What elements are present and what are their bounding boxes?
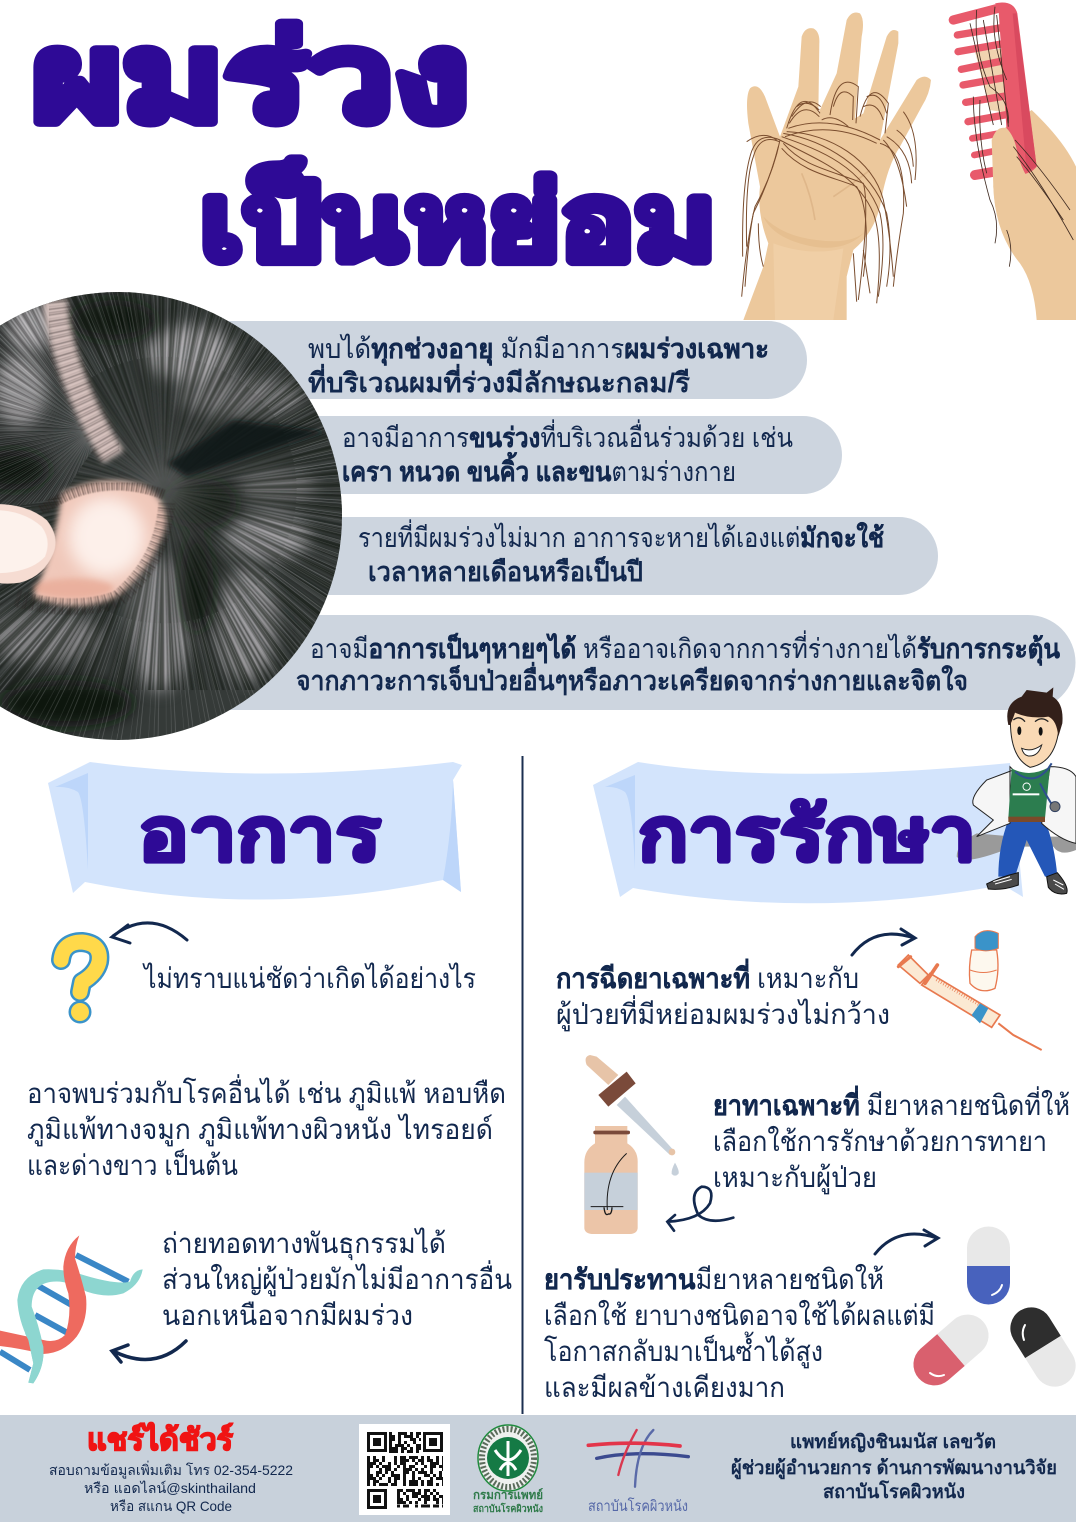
treatment 3: oral medicine: โอกาสกลับมาเป็นซ้ำได้สูง [544, 1331, 823, 1369]
radial dark hair [0, 323, 330, 657]
footer: author credit: สถาบันโรคผิวหนัง [823, 1480, 965, 1503]
treatment 2: topical medicine [584, 1055, 1070, 1234]
symptom 3: genetics: นอกเหนือจากมีผมร่วง [162, 1300, 413, 1331]
hair [1007, 687, 1063, 737]
treatment 1: injection [556, 929, 1042, 1050]
comb [953, 7, 1023, 175]
icon: DNA [0, 1235, 143, 1383]
treatment 1: injection: ผู้ป่วยที่มีหย่อมผมร่วงไม่กว้าง [556, 995, 890, 1032]
treatment 2: topical medicine: เลือกใช้การรักษาด้วยการทายา [713, 1125, 1047, 1157]
info pill 4 [200, 615, 1076, 710]
dark hair masses [0, 300, 237, 727]
info pill 3: รายที่มีผมร่วงไม่มาก อาการจะหายได้เองแต่มักจะใช้ [358, 519, 884, 553]
icon: syringe and vial [898, 931, 1042, 1050]
radial light hair [0, 323, 330, 657]
treatment 1: injection: การฉีดยาเฉพาะที่ เหมาะกับ [556, 958, 859, 994]
info pill 2: เครา หนวด ขนคิ้ว และขนตามร่างกาย [342, 451, 736, 487]
symptom 2: associated diseases: และด่างขาว เป็นต้น [27, 1148, 238, 1181]
footer: author credit: แพทย์หญิงชินมนัส เลขวัต [790, 1431, 996, 1453]
fingertip [0, 504, 56, 584]
coat [973, 767, 1013, 837]
treatment 2: topical medicine: เหมาะกับผู้ป่วย [713, 1162, 877, 1195]
thumb [992, 128, 1043, 247]
footer: author credit [731, 1431, 1057, 1503]
section banner: symptoms [48, 762, 462, 900]
info pill 3: เวลาหลายเดือนหรือเป็นปี [368, 554, 643, 587]
heading: treatment: การรักษา [638, 793, 976, 876]
treatment 3: oral medicine: เลือกใช้ ยาบางชนิดอาจใช้ได้ผลแต่มี [544, 1299, 935, 1331]
eyes and smile [1017, 726, 1021, 735]
treatment 3: oral medicine: และมีผลข้างเคียงมาก [544, 1372, 785, 1403]
symptom 2: associated diseases: ภูมิแพ้ทางจมูก ภูมิแพ้ทางผิวหนัง ไทรอยด์ [27, 1114, 493, 1147]
arrow [112, 923, 187, 943]
footer: Institute of Dermatology logo [588, 1430, 688, 1515]
icon: dropper bottle [584, 1055, 733, 1234]
treatment 3: oral medicine: ยารับประทานมียาหลายชนิดให้ [544, 1263, 884, 1295]
icon: question mark [61, 942, 99, 1022]
footer band [0, 1415, 1076, 1522]
skin behind comb [975, 48, 1010, 113]
arrow [112, 1341, 186, 1362]
footer: contact: หรือ แอดไลน์@skinthailand [84, 1480, 256, 1496]
symptom 1: unknown cause [61, 923, 476, 1022]
info pill 1: พบได้ทุกช่วงอายุ มักมีอาการผมร่วงเฉพาะ [308, 334, 769, 366]
symptom 3: genetics [0, 1228, 512, 1383]
icon: capsules [905, 1226, 1076, 1395]
section banner: treatment [593, 762, 1023, 903]
symptom 1: unknown cause: ไม่ทราบแน่ชัดว่าเกิดได้อย่างไร [142, 963, 476, 994]
bald patch [33, 481, 166, 606]
footer: Ministry of Public Health logo [473, 1425, 543, 1515]
illustration: hand holding hair [742, 12, 931, 320]
info pill 1: ที่บริเวณผมที่ร่วงมีลักษณะกลม/รี [308, 363, 691, 398]
cape [957, 833, 1076, 860]
hair left of parting [0, 300, 95, 506]
info pill 4: อาจมีอาการเป็นๆหายๆได้ หรืออาจเกิดจากการที่ร่างกายได้รับการกระตุ้น [310, 630, 1060, 666]
photo: scalp with bald patch [0, 292, 342, 740]
info pill 2 [200, 416, 842, 494]
arrow [852, 929, 915, 955]
footer: Institute of Dermatology logo: สถาบันโรคผิวหนัง [588, 1497, 688, 1515]
footer: contact [49, 1422, 293, 1514]
hair fringe around patch [17, 503, 167, 607]
arrow [875, 1230, 938, 1254]
info pill 1 [200, 321, 807, 399]
hand back [993, 110, 1076, 320]
dark wedge of hair [167, 420, 327, 477]
loop arrow [667, 1187, 733, 1231]
title [32, 10, 716, 282]
info pill 3 [200, 517, 938, 595]
symptom 3: genetics: ส่วนใหญ่ผู้ป่วยมักไม่มีอาการอื่น [162, 1260, 512, 1297]
illustration: comb with hair in hand [953, 2, 1076, 320]
hair parting [55, 300, 113, 457]
stethoscope [1015, 763, 1053, 807]
symptom 3: genetics: ถ่ายทอดทางพันธุกรรมได้ [162, 1228, 446, 1261]
title: ผมร่วง [32, 10, 469, 146]
footer: author credit: ผู้ช่วยผู้อำนวยการ ด้านการพัฒนางานวิจัย [731, 1457, 1057, 1480]
footer: QR code [359, 1424, 450, 1515]
divider [522, 756, 524, 1414]
mascot: doctor [957, 687, 1076, 894]
shoes [987, 873, 1018, 889]
info pill 4: จากภาวะการเจ็บป่วยอื่นๆหรือภาวะเครียดจากร่างกายและจิตใจ [296, 661, 968, 696]
footer: contact: แชร์ได้ชัวร์ [87, 1422, 233, 1457]
shirt [1008, 767, 1050, 818]
title: เป็นหย่อม [200, 159, 716, 282]
footer: contact: หรือ สแกน QR Code [110, 1498, 232, 1514]
footer: contact: สอบถามข้อมูลเพิ่มเติม โทร 02-354-5222 [49, 1461, 293, 1479]
legs [998, 820, 1057, 877]
footer: Ministry of Public Health logo: กรมการแพทย์ [473, 1488, 543, 1502]
symptom 2: associated diseases: อาจพบร่วมกับโรคอื่นได้ เช่น ภูมิแพ้ หอบหืด [27, 1074, 506, 1111]
info pill 2: อาจมีอาการขนร่วงที่บริเวณอื่นร่วมด้วย เช่น [342, 419, 793, 453]
treatment 3: oral medicine [544, 1226, 1076, 1403]
grey hair areas [0, 325, 317, 690]
face [1010, 707, 1061, 767]
symptom 2: associated diseases [27, 1074, 506, 1181]
section banner: symptoms: อาการ [138, 793, 381, 876]
footer: Ministry of Public Health logo: สถาบันโรคผิวหนัง [473, 1502, 543, 1515]
